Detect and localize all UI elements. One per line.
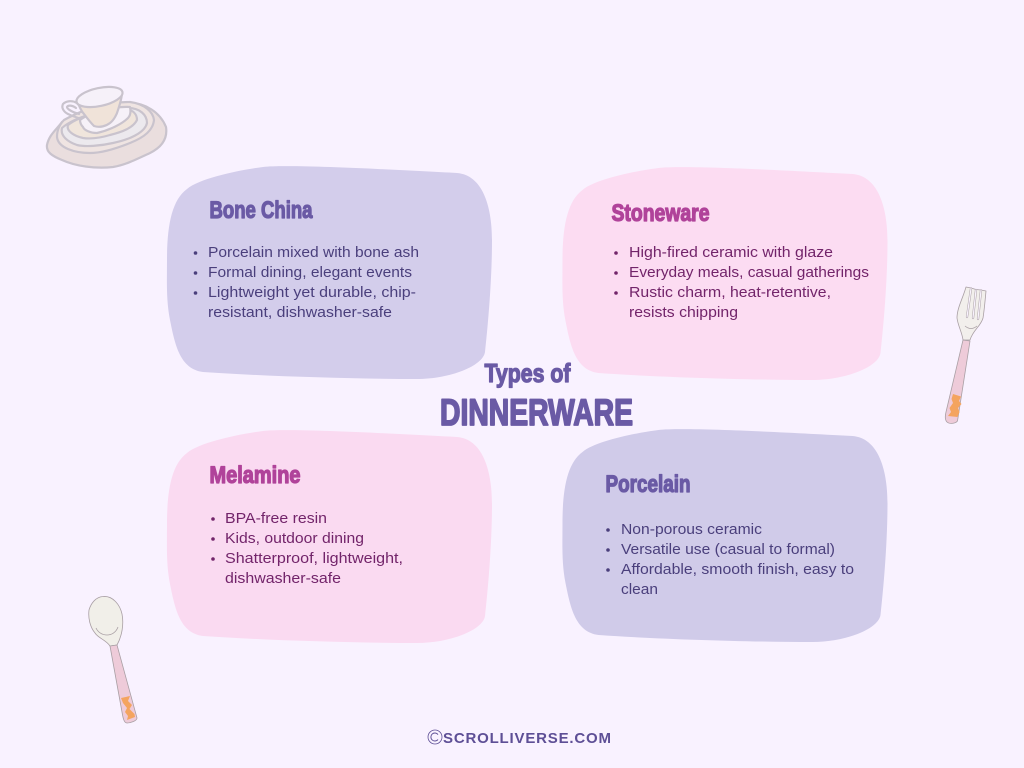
title line: Types of: Types of — [484, 358, 571, 388]
footer credit — [428, 730, 611, 747]
list: Melamine facts: dishwasher-safe — [225, 570, 341, 587]
icon: spoon — [89, 596, 137, 723]
list: Stoneware facts: resists chipping — [629, 304, 738, 321]
list: Bone China facts: Lightweight yet durable, chip- — [208, 284, 416, 301]
list: Bone China facts — [194, 244, 419, 321]
title line: DINNERWARE: DINNERWARE — [440, 392, 633, 433]
heading: Stoneware: Stoneware — [612, 200, 710, 227]
list: Stoneware facts: Rustic charm, heat-retentive, — [629, 284, 831, 301]
icon: fork — [945, 287, 986, 423]
list: Melamine facts — [211, 510, 403, 587]
list: Stoneware facts: High-fired ceramic with glaze — [629, 244, 833, 261]
panel: Stoneware — [562, 167, 888, 380]
list: Porcelain facts: Versatile use (casual to formal) — [621, 541, 835, 558]
icon: stacked plates and cup — [47, 83, 166, 168]
list: Melamine facts: Kids, outdoor dining — [225, 530, 364, 547]
heading: Porcelain: Porcelain — [606, 471, 690, 498]
list: Porcelain facts — [606, 521, 854, 598]
list: Melamine facts: Shatterproof, lightweight, — [225, 550, 403, 567]
copyright mark — [428, 730, 442, 744]
list: Porcelain facts: Affordable, smooth finish, easy to — [621, 561, 854, 578]
list: Porcelain facts: Non-porous ceramic — [621, 521, 763, 538]
list: Stoneware facts — [614, 244, 869, 321]
list: Bone China facts: Porcelain mixed with bone ash — [208, 244, 419, 261]
panel: Bone China — [167, 166, 492, 379]
list: Bone China facts: resistant, dishwasher-safe — [208, 304, 392, 321]
list: Porcelain facts: clean — [621, 581, 658, 598]
site name: SCROLLIVERSE.COM — [443, 730, 611, 747]
title — [440, 358, 633, 433]
list: Melamine facts: BPA-free resin — [225, 510, 327, 527]
heading: Melamine: Melamine — [210, 462, 300, 489]
list: Bone China facts: Formal dining, elegant events — [208, 264, 412, 281]
panel: Melamine — [167, 430, 492, 643]
panel: Porcelain — [562, 429, 888, 642]
heading: Bone China: Bone China — [210, 197, 313, 224]
list: Stoneware facts: Everyday meals, casual gatherings — [629, 264, 869, 281]
